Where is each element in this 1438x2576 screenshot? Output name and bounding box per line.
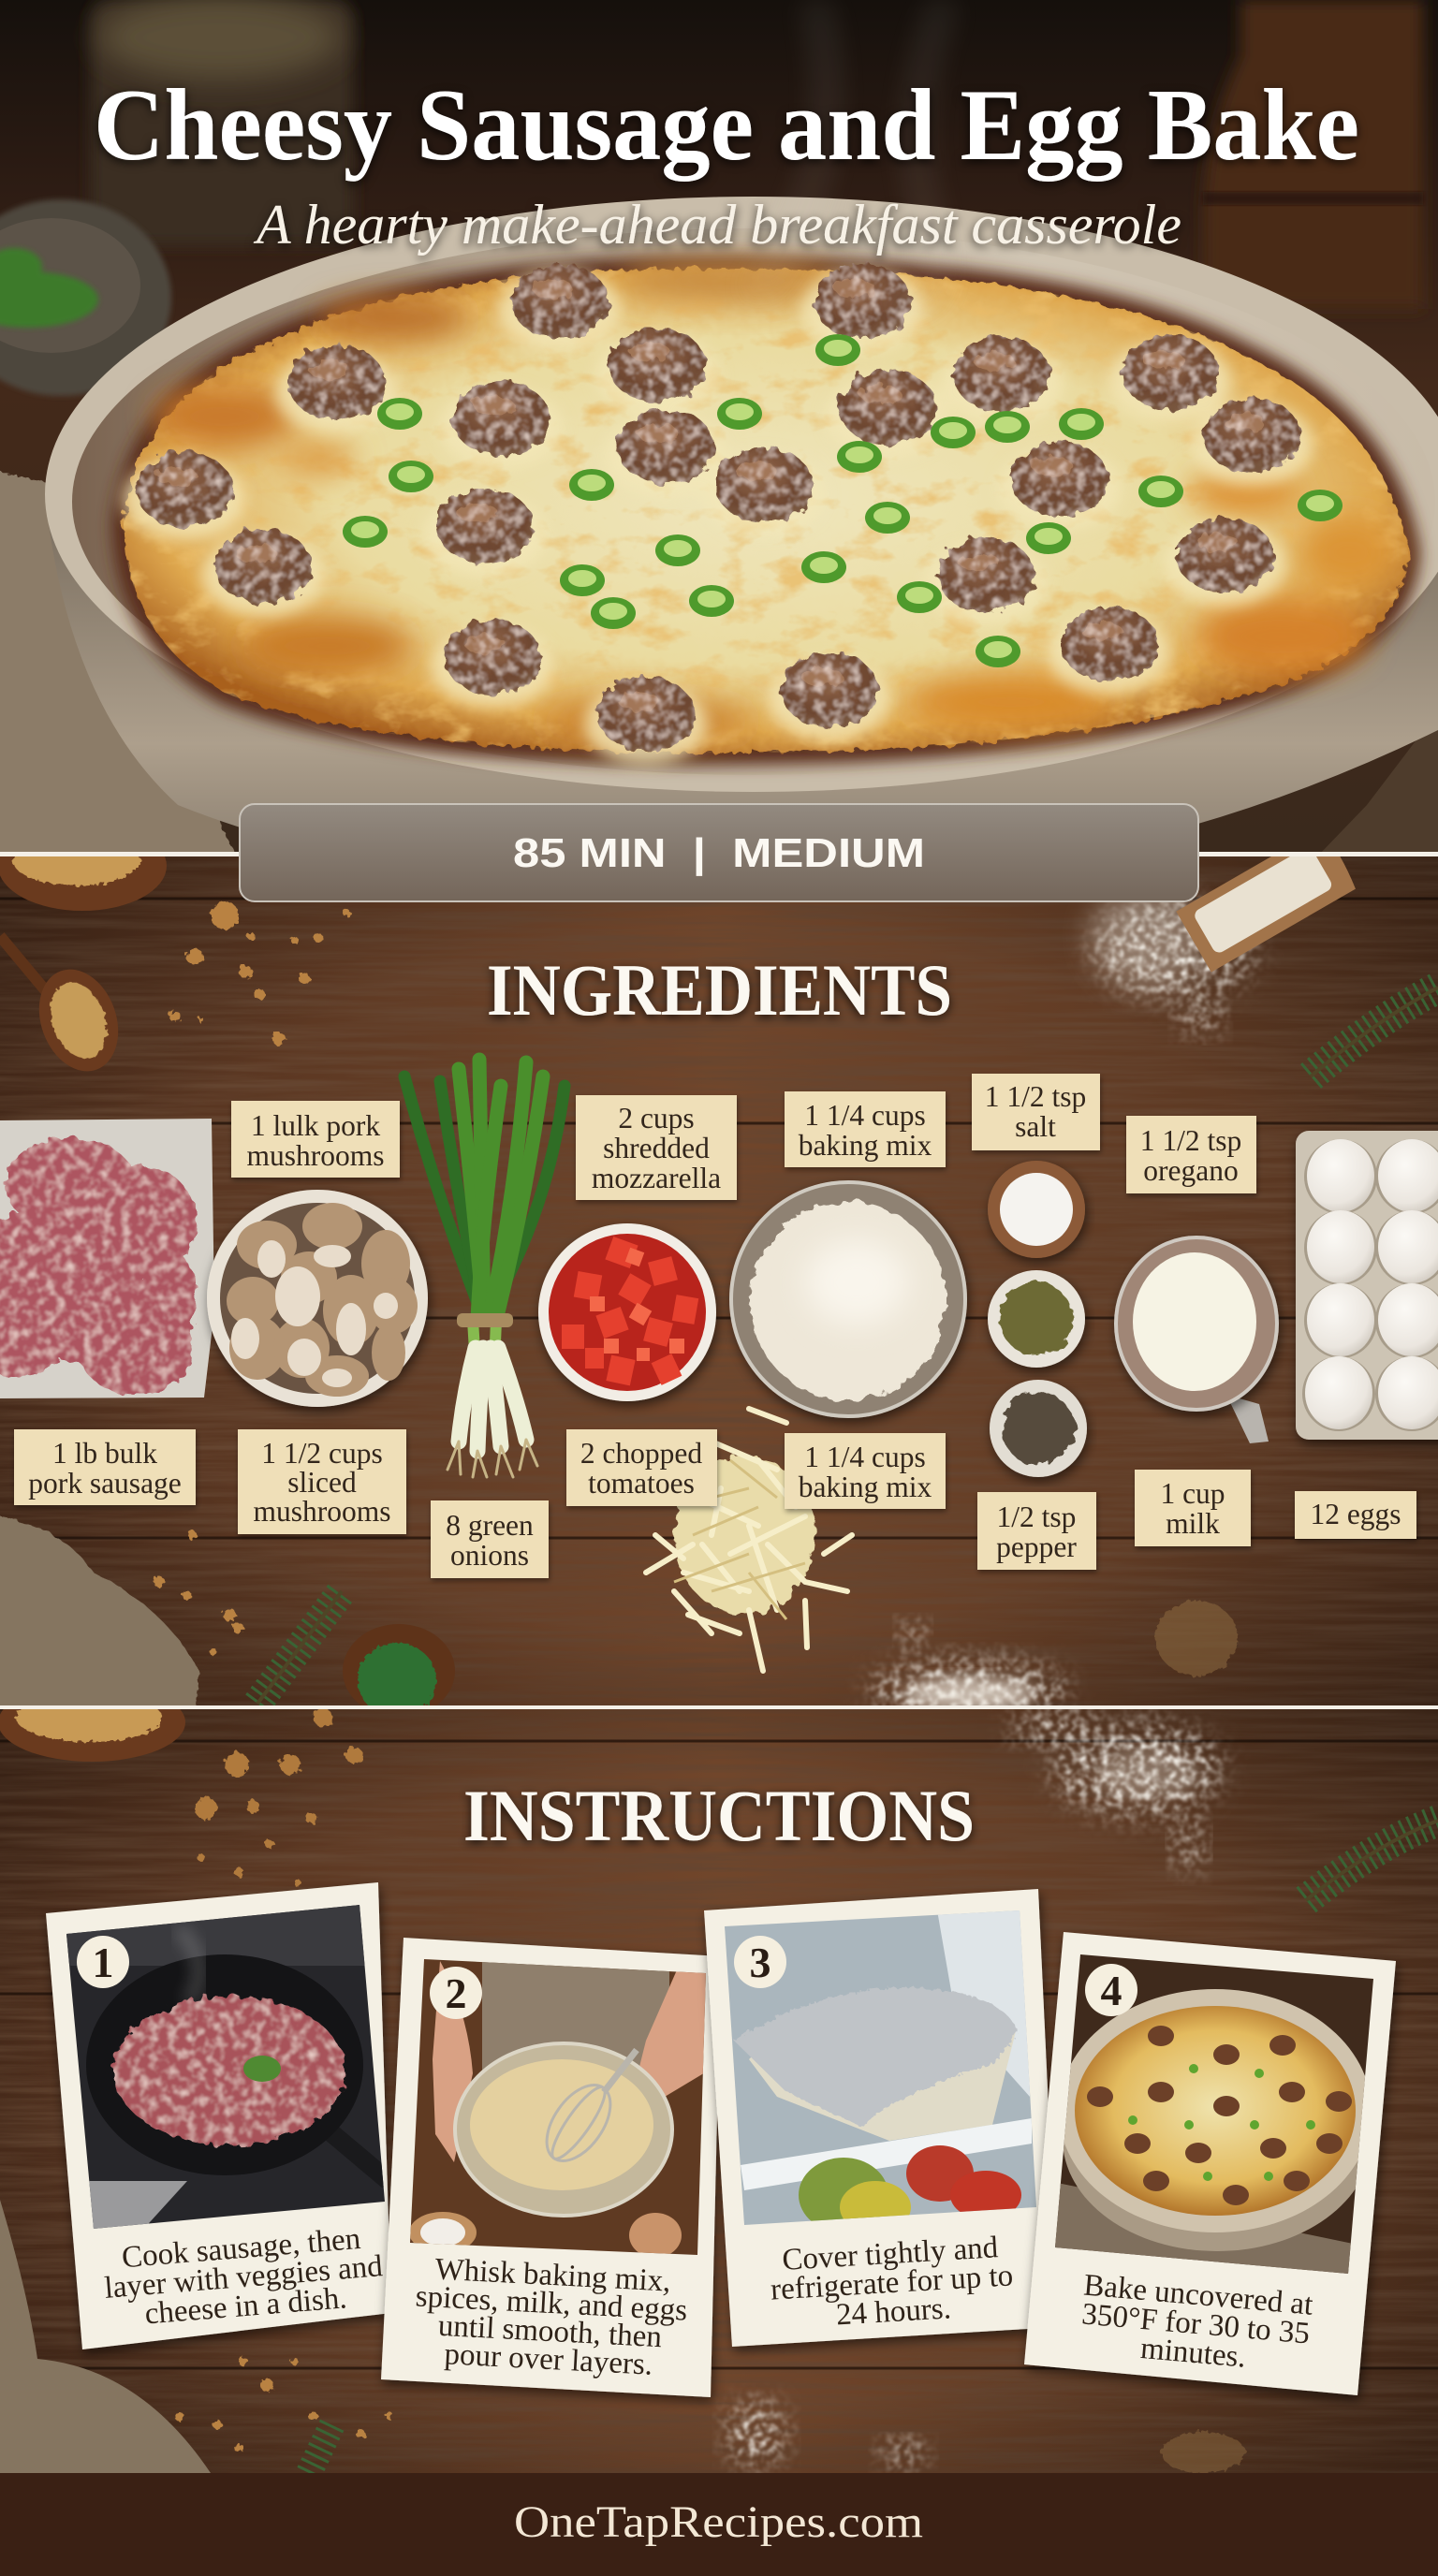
steam [749, 0, 946, 302]
label: milk [1135, 1470, 1251, 1546]
label: shredded mozzarella [576, 1095, 737, 1200]
step 2 caption [412, 2251, 690, 2384]
illustration: shredded cheese [646, 1409, 852, 1671]
step 4 caption: 350°F for 30 to 35 [1080, 2297, 1311, 2351]
illustration: tomato bowl [538, 1223, 716, 1401]
step 4 number badge: 4 [1101, 1967, 1122, 2014]
step 1 caption: cheese in a dish. [143, 2281, 348, 2332]
footer: OneTapRecipes.com [514, 2497, 923, 2547]
label: chopped tomatoes: 2 chopped [580, 1437, 702, 1470]
step 4 photo: baked casserole [1049, 1947, 1381, 2284]
step 2 caption: until smooth, then [437, 2309, 663, 2354]
illustration: mushroom bowl [207, 1190, 428, 1407]
step 1 number badge: 1 [92, 1939, 114, 1986]
label: shredded mozzarella: shredded [603, 1132, 710, 1164]
label: pork sausage: 1 lb bulk [52, 1437, 157, 1470]
label: green onions [431, 1500, 549, 1578]
step 1 photo: sausage in skillet [56, 1900, 393, 2237]
label: baking mix top: baking mix [799, 1129, 932, 1162]
label: baking mix bottom [785, 1433, 946, 1509]
step 3 caption: refrigerate for up to [770, 2259, 1014, 2307]
baking dish [45, 197, 1438, 890]
step 1 caption: Cook sausage, then [121, 2222, 361, 2275]
label: oregano: oregano [1143, 1154, 1239, 1187]
label: green onions: onions [450, 1539, 529, 1572]
step 3 photo: foil dish in fridge [721, 1905, 1039, 2233]
illustration: pepper bowl [990, 1380, 1087, 1477]
label: pepper: pepper [996, 1530, 1077, 1563]
panel: instructions background [0, 1707, 1438, 2473]
divider lines [0, 852, 1438, 1709]
illustration: oregano bowl [988, 1270, 1085, 1368]
illustration: flour bowl [731, 1182, 965, 1416]
step 2 caption: spices, milk, and eggs [415, 2279, 688, 2328]
label: bulk pork mushrooms: mushrooms [246, 1139, 385, 1172]
illustration: green onions [404, 1060, 565, 1477]
label: sliced mushrooms: 1 1/2 cups [261, 1437, 383, 1470]
label: pork sausage [14, 1429, 196, 1505]
footer [0, 2473, 1438, 2576]
label: oregano: 1 1/2 tsp [1140, 1124, 1241, 1157]
step 4 number badge [1085, 1964, 1137, 2016]
label: sliced mushrooms: sliced [287, 1466, 357, 1499]
section heading: ingredients: INGREDIENTS [487, 949, 952, 1031]
label: milk: 1 cup [1160, 1477, 1225, 1510]
step 1 caption: layer with veggies and [103, 2249, 384, 2305]
panel: ingredients background [0, 856, 1438, 1707]
label: pork sausage: pork sausage [28, 1467, 182, 1500]
label: eggs [1295, 1491, 1416, 1539]
casserole top [112, 262, 1423, 765]
illustration: milk jug [1116, 1237, 1277, 1443]
label: pepper [977, 1492, 1096, 1570]
label: sliced mushrooms: mushrooms [253, 1495, 391, 1528]
label: baking mix bottom: 1 1/4 cups [804, 1441, 926, 1473]
step 3 caption: Cover tightly and [781, 2231, 1000, 2277]
step 4 caption: minutes. [1139, 2332, 1247, 2375]
label: eggs: 12 eggs [1310, 1498, 1401, 1530]
section heading: instructions: INSTRUCTIONS [463, 1775, 975, 1856]
step 2 caption: pour over layers. [444, 2337, 653, 2382]
title: Cheesy Sausage and Egg Bake [94, 68, 1359, 182]
illustration: salt bowl [988, 1161, 1085, 1258]
illustration: sausage on paper [0, 1119, 214, 1398]
step card 3 [704, 1889, 1059, 2347]
label: bulk pork mushrooms [231, 1101, 400, 1178]
subtitle: A hearty make-ahead breakfast casserole [253, 194, 1181, 256]
label: milk: milk [1166, 1507, 1220, 1540]
label: chopped tomatoes [566, 1429, 717, 1506]
step card 2 [381, 1938, 721, 2397]
label: sliced mushrooms [238, 1429, 406, 1534]
label: shredded mozzarella: 2 cups [618, 1102, 695, 1134]
step 1 caption [101, 2220, 387, 2334]
step 1 number badge [77, 1936, 129, 1988]
step 4 caption [1078, 2268, 1314, 2379]
label: baking mix top: 1 1/4 cups [804, 1099, 926, 1132]
step 3 caption [768, 2230, 1016, 2336]
step 2 caption: Whisk baking mix, [434, 2252, 671, 2299]
label: baking mix top [785, 1091, 946, 1167]
step 4 caption: Bake uncovered at [1082, 2268, 1314, 2322]
label: oregano [1126, 1116, 1256, 1193]
decor: ingredients corner props [0, 821, 1438, 1722]
step 3 number badge [734, 1936, 786, 1988]
step 2 number badge: 2 [446, 1969, 466, 2017]
label: green onions: 8 green [446, 1509, 534, 1542]
label: baking mix bottom: baking mix [799, 1471, 932, 1503]
step 3 caption: 24 hours. [835, 2291, 952, 2333]
label: chopped tomatoes: tomatoes [588, 1467, 695, 1500]
label: shredded mozzarella: mozzarella [592, 1162, 721, 1194]
label: pepper: 1/2 tsp [997, 1500, 1076, 1533]
step card 1 [46, 1882, 393, 2349]
step 3 number badge: 3 [749, 1939, 771, 1986]
labels: ingredients [14, 1074, 1416, 1578]
step 2 number badge [430, 1967, 482, 2019]
hero photo: casserole on table [0, 0, 1438, 890]
step 2 photo: whisking batter [403, 1952, 712, 2261]
step card 4 [1024, 1932, 1396, 2395]
illustration: egg carton [1296, 1131, 1438, 1440]
stats badge: 85 MIN | MEDIUM [513, 830, 925, 877]
stats badge [240, 804, 1198, 901]
label: bulk pork mushrooms: 1 lulk pork [251, 1109, 380, 1142]
label: salt: 1 1/2 tsp [985, 1080, 1086, 1113]
label: salt: salt [1015, 1110, 1056, 1143]
decor: instructions corner props [0, 1683, 1438, 2473]
label: salt [972, 1074, 1100, 1150]
